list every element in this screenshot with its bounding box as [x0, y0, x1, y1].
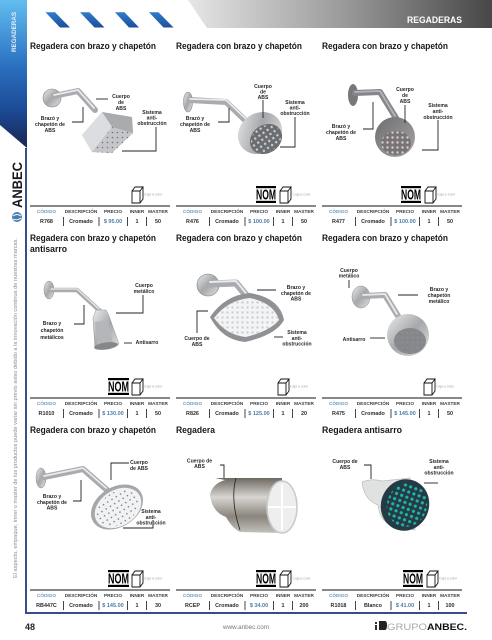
packaging icon	[424, 379, 455, 395]
product photo	[43, 89, 133, 153]
callouts: Sistema	[141, 509, 161, 515]
data table: DESCRIPCIÓN	[65, 399, 98, 406]
product photo	[348, 84, 415, 157]
NOM mark: NOM	[256, 570, 276, 588]
callouts: Cuerpo de	[184, 336, 210, 342]
data table: 50	[301, 219, 307, 225]
NOM mark: NOM	[256, 186, 276, 204]
data table: MASTER	[440, 593, 461, 598]
data table: R826	[186, 411, 199, 417]
data table: $ 41.00	[396, 603, 414, 609]
data table: CÓDIGO	[329, 591, 348, 598]
data table: MASTER	[440, 209, 461, 214]
data table: Cromado	[69, 411, 94, 417]
NOM mark	[108, 378, 129, 396]
product photo	[352, 286, 429, 356]
panel: R826	[176, 233, 316, 418]
packaging icon: Caja a color	[144, 576, 163, 580]
data table: INNER	[276, 593, 291, 598]
title: Regadera con brazo y chapetón	[30, 425, 156, 436]
callouts: anti-	[147, 116, 158, 122]
callouts: obstrucción	[137, 121, 167, 127]
product photo	[362, 472, 436, 538]
data table: PRECIO	[250, 593, 268, 598]
callouts: ABS	[291, 296, 302, 302]
callouts: obstrucción	[136, 520, 166, 526]
panel: RCEP	[176, 425, 316, 610]
NOM mark: NOM	[401, 186, 421, 204]
data table: 20	[301, 411, 307, 417]
data table: $ 130.00	[102, 411, 124, 417]
section title: REGADERAS	[407, 15, 462, 25]
data table: $ 34.00	[250, 603, 268, 609]
callouts: anti-	[434, 465, 445, 471]
NOM mark	[108, 570, 129, 588]
callouts: chapetón de	[281, 291, 311, 297]
data table: CÓDIGO	[37, 207, 56, 214]
packaging icon: Caja a color	[292, 576, 311, 580]
panel: R475	[322, 233, 462, 418]
title: Regadera con brazo y chapetón	[30, 41, 156, 52]
data table: DESCRIPCIÓN	[357, 399, 390, 406]
callouts: Antisarro	[136, 340, 158, 346]
website: www.anbec.com	[222, 624, 269, 631]
packaging icon	[280, 571, 311, 587]
title: Regadera	[176, 425, 216, 436]
title: Regadera con brazo y chapetón	[322, 41, 448, 52]
data table: CÓDIGO	[37, 591, 56, 598]
data table: Blanco	[364, 603, 383, 609]
callouts	[37, 460, 166, 528]
data table: Cromado	[69, 603, 94, 609]
NOM mark	[403, 570, 423, 588]
callouts: Cuerpo	[254, 84, 272, 90]
data table: PRECIO	[104, 209, 122, 214]
callouts: Cuerpo	[130, 460, 148, 466]
data table: R1018	[331, 603, 346, 609]
callouts: Brazó y	[332, 124, 350, 130]
panel: R477	[322, 41, 462, 226]
product photo	[36, 468, 151, 539]
callouts: anti-	[292, 336, 303, 342]
data table: Cromado	[361, 411, 386, 417]
data table: PRECIO	[396, 209, 414, 214]
title: Regadera con brazo y chapetón	[176, 233, 302, 244]
callouts: ABS	[45, 128, 56, 134]
disclaimer vertical text: El aspecto, empaque, inner o master de los productos puede variar sin previo aviso debido a la innovación continua de nuestras marcas.	[13, 238, 19, 578]
data table: Cromado	[69, 219, 94, 225]
callouts: Antisarro	[343, 337, 365, 343]
packaging icon	[425, 187, 456, 203]
callouts	[187, 458, 224, 478]
header banner	[188, 0, 492, 28]
title: Regadera con brazo y chapetón	[30, 233, 156, 244]
data table: 1	[282, 411, 284, 417]
callouts: metálicos	[40, 335, 64, 341]
data table: INNER	[422, 401, 437, 406]
data table: 200	[300, 603, 308, 609]
data table: DESCRIPCIÓN	[357, 207, 390, 214]
packaging icon: Caja a color	[436, 384, 455, 388]
packaging icon	[132, 187, 163, 203]
callouts: Brazo y	[430, 287, 448, 293]
callouts: Cuerpo	[135, 283, 153, 289]
packaging icon: Caja a color	[437, 192, 456, 196]
data table	[322, 206, 462, 226]
data table: MASTER	[148, 401, 169, 406]
data table: 1	[428, 411, 430, 417]
callouts: obstrucción	[280, 111, 310, 117]
callouts: Cuerpo	[112, 94, 130, 100]
callouts: de ABS	[130, 466, 149, 472]
header stripes	[46, 12, 174, 28]
product photo	[210, 478, 297, 533]
callouts: Cuerpo	[396, 87, 414, 93]
data table: CÓDIGO	[183, 207, 202, 214]
callouts: chapetón de	[180, 122, 210, 128]
packaging icon: Caja a color	[292, 192, 311, 196]
data table: CÓDIGO	[329, 207, 348, 214]
data table: DESCRIPCIÓN	[211, 591, 244, 598]
data table: $ 125.00	[248, 411, 270, 417]
data table: CÓDIGO	[183, 399, 202, 406]
callouts: obstrucción	[424, 470, 454, 476]
packaging icon: Caja a color	[439, 576, 458, 580]
data table: PRECIO	[250, 209, 268, 214]
data table: RCEP	[185, 603, 200, 609]
callouts: metálico	[339, 274, 359, 280]
footer logo: Grupo Anbec: ANBEC.	[427, 622, 467, 632]
data table: CÓDIGO	[37, 399, 56, 406]
callouts: chapetón de	[326, 130, 356, 136]
callouts	[40, 283, 158, 346]
product photo	[44, 281, 119, 351]
data table: INNER	[130, 209, 145, 214]
data table: 1	[136, 603, 138, 609]
callouts: ABS	[400, 99, 411, 105]
data table: 50	[447, 411, 453, 417]
data table: DESCRIPCIÓN	[65, 591, 98, 598]
callouts: de	[118, 100, 124, 106]
callouts	[184, 285, 312, 348]
data table: MASTER	[148, 209, 169, 214]
NOM mark	[256, 570, 276, 588]
data table	[30, 398, 170, 418]
data table	[322, 398, 462, 418]
callouts: Brazo y	[43, 321, 61, 327]
callouts: de	[260, 90, 266, 96]
brand logo vertical: ANBEC: ANBEC	[9, 162, 25, 208]
callouts	[35, 94, 167, 151]
data table: PRECIO	[250, 401, 268, 406]
NOM mark	[401, 186, 421, 204]
NOM mark	[256, 186, 276, 204]
title: Regadera con brazo y chapetón	[322, 233, 448, 244]
footer logo: Grupo Anbec: GRUPO	[387, 622, 427, 632]
data table: INNER	[130, 401, 145, 406]
data table: MASTER	[148, 593, 169, 598]
data table: 50	[155, 411, 161, 417]
panel: R1010	[30, 233, 170, 418]
callouts	[326, 87, 453, 150]
callouts: Cuerpo	[340, 268, 358, 274]
sidebar band	[0, 0, 27, 148]
data table: 50	[155, 219, 161, 225]
callouts: obstrucción	[423, 115, 453, 121]
data table: CÓDIGO	[329, 399, 348, 406]
NOM mark: NOM	[108, 378, 129, 396]
callouts: chapetón de	[35, 122, 65, 128]
data table: INNER	[422, 593, 437, 598]
callouts: ABS	[258, 95, 269, 101]
data table	[30, 206, 170, 226]
sidebar label: REGADERAS: REGADERAS	[11, 11, 18, 52]
title: Regadera con brazo y chapetón	[176, 41, 302, 52]
data table: DESCRIPCIÓN	[357, 591, 390, 598]
callouts: Sistema	[287, 330, 307, 336]
packaging icon	[132, 571, 163, 587]
packaging icon	[280, 187, 311, 203]
data table: 1	[282, 603, 284, 609]
data table: INNER	[276, 209, 291, 214]
data table	[176, 590, 316, 610]
data table: INNER	[422, 209, 437, 214]
product photo	[184, 92, 290, 163]
callouts: chapetón	[428, 293, 450, 299]
callouts: chapetón de	[37, 500, 67, 506]
panel: R476	[176, 41, 316, 226]
NOM mark: NOM	[403, 570, 423, 588]
data table	[176, 206, 316, 226]
data table: $ 100.00	[394, 219, 416, 225]
page frame line	[26, 148, 467, 613]
data table	[176, 398, 316, 418]
callouts	[339, 268, 450, 343]
data table: 1	[136, 411, 138, 417]
data table: $ 95.00	[104, 219, 122, 225]
data table: CÓDIGO	[183, 591, 202, 598]
data table: R475	[332, 411, 345, 417]
product photo	[197, 274, 284, 342]
data table: MASTER	[294, 593, 315, 598]
callouts: anti-	[146, 515, 157, 521]
data table: MASTER	[294, 209, 315, 214]
callouts: ABS	[194, 464, 205, 470]
callouts: Sistema	[142, 110, 162, 116]
callouts: ABS	[192, 342, 203, 348]
callouts: ABS	[47, 506, 58, 512]
callouts: de	[402, 93, 408, 99]
callouts: Sistema	[285, 100, 305, 106]
data table: R477	[332, 219, 345, 225]
callouts: metálico	[134, 289, 154, 295]
data table: 1	[428, 219, 430, 225]
callouts: ABS	[116, 106, 127, 112]
data table: R1010	[39, 411, 54, 417]
callouts: obstrucción	[282, 342, 312, 348]
packaging icon: Caja a color	[144, 192, 163, 196]
panel: R768	[30, 41, 170, 226]
callouts: ABS	[190, 128, 201, 134]
data table: MASTER	[440, 401, 461, 406]
data table	[30, 590, 170, 610]
data table: Cromado	[215, 219, 240, 225]
packaging icon	[427, 571, 458, 587]
panel: RB447C	[30, 425, 170, 610]
data table: DESCRIPCIÓN	[211, 399, 244, 406]
callouts: ABS	[336, 136, 347, 142]
callouts	[332, 459, 454, 483]
callouts: anti-	[433, 109, 444, 115]
callouts: Brazo y	[287, 285, 305, 291]
packaging icon: Caja a color	[290, 384, 309, 388]
title: antisarro	[30, 244, 67, 255]
title: Regadera antisarro	[322, 425, 402, 436]
packaging icon	[132, 379, 163, 395]
data table: 30	[155, 603, 161, 609]
data table: INNER	[276, 401, 291, 406]
data table	[322, 590, 462, 610]
callouts: Cuerpo de	[332, 459, 358, 465]
footer logo: Grupo Anbec	[375, 621, 467, 632]
data table: R476	[186, 219, 199, 225]
callouts	[180, 84, 310, 147]
page number: 48	[25, 622, 35, 632]
packaging icon	[278, 379, 309, 395]
callouts: Sistema	[428, 103, 448, 109]
panel: R1018	[322, 425, 462, 610]
data table: PRECIO	[104, 401, 122, 406]
data table: PRECIO	[104, 593, 122, 598]
data table: 1	[428, 603, 430, 609]
data table: $ 100.00	[248, 219, 270, 225]
data table: 100	[446, 603, 454, 609]
data table: MASTER	[294, 401, 315, 406]
data table: DESCRIPCIÓN	[65, 207, 98, 214]
callouts: chapetón	[41, 328, 63, 334]
callouts: Brazo y	[43, 494, 61, 500]
data table: 1	[136, 219, 138, 225]
data table: $ 145.00	[394, 411, 416, 417]
packaging icon: Caja a color	[144, 384, 163, 388]
NOM mark: NOM	[108, 570, 129, 588]
data table: 1	[282, 219, 284, 225]
data table: 50	[447, 219, 453, 225]
data table: R768	[40, 219, 53, 225]
callouts: metálico	[429, 299, 449, 305]
data table: PRECIO	[396, 593, 414, 598]
data table: $ 145.00	[102, 603, 124, 609]
data table: PRECIO	[396, 401, 414, 406]
data table: Cromado	[215, 603, 240, 609]
data table: DESCRIPCIÓN	[211, 207, 244, 214]
callouts: anti-	[290, 106, 301, 112]
data table: INNER	[130, 593, 145, 598]
data table: RB447C	[36, 603, 57, 609]
callouts: ABS	[340, 465, 351, 471]
data table: Cromado	[215, 411, 240, 417]
callouts: Sistema	[429, 459, 449, 465]
callouts: Brazó y	[186, 116, 204, 122]
callouts: Cuerpo de	[187, 458, 212, 464]
callouts: Brazó y	[41, 116, 59, 122]
data table: Cromado	[361, 219, 386, 225]
